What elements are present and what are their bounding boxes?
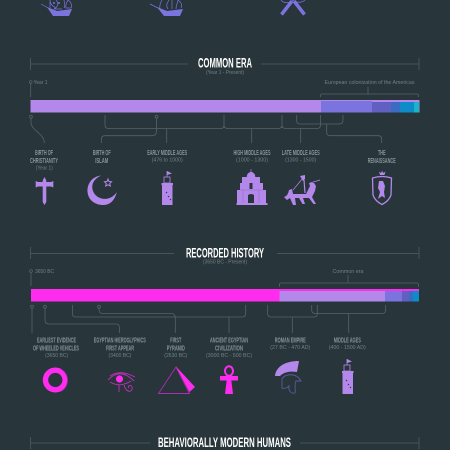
bracket: common era (280, 269, 418, 287)
timeline bar: recorded history (31, 289, 419, 302)
bracket: European colonization: European colonization of the Americas (324, 80, 415, 86)
label: early middle ages: (476 to 1000) (152, 158, 183, 164)
connectors: recorded history (32, 305, 386, 333)
label: late middle ages: (1300 - 1500) (285, 158, 317, 164)
label: the renaissance: THE (378, 150, 386, 157)
label: middle ages: (400 - 1500 AD) (329, 345, 366, 351)
label: early middle ages: EARLY MIDDLE AGES (147, 150, 187, 157)
panel: common era (29, 56, 420, 205)
marker: year 1 (29, 80, 48, 97)
label: wheeled vehicles: OF WHEELED VEHICLES (33, 346, 79, 352)
label: high middle ages (234, 150, 271, 164)
label: roman empire: (27 BC - 470 AD) (270, 345, 311, 351)
icon: eye of horus (108, 373, 135, 392)
connectors: common era (31, 115, 382, 143)
icon: renaissance shield (372, 171, 392, 204)
bracket: common era: Common era (332, 269, 364, 275)
label: hieroglyphics: EGYPTIAN HIEROGLYPHICS (94, 338, 146, 344)
icon: crossed swords (281, 0, 305, 14)
label: middle ages (329, 338, 366, 351)
label: first pyramid: PYRAMID (167, 346, 185, 352)
label: birth of christianity: BIRTH OF (35, 150, 53, 157)
label: birth of christianity (30, 150, 58, 172)
label: first pyramid: FIRST (170, 338, 182, 344)
label: ancient egyptian civilization: ANCIENT EGYPTIAN (210, 338, 248, 344)
label: the renaissance (368, 150, 396, 165)
label: late middle ages (282, 150, 320, 164)
label: birth of islam (93, 150, 111, 165)
icon: cross (36, 177, 53, 205)
label: wheeled vehicles: (3650 BC) (45, 353, 69, 359)
label: middle ages: MIDDLE AGES (334, 338, 361, 344)
label: roman empire (270, 338, 311, 351)
label: first pyramid (164, 338, 188, 359)
label: birth of christianity: CHRISTIANITY (30, 158, 58, 165)
icon: ship left (41, 0, 72, 16)
marker: year 1: Year 1 (34, 80, 48, 86)
icon: pyramid (158, 366, 195, 394)
marker: 3650 BC (30, 269, 54, 286)
label: first pyramid: (2630 BC) (164, 353, 188, 359)
subheading: common era range: (Year 1 - Present) (206, 70, 244, 76)
icon: roman helmet (275, 361, 301, 393)
icon: crescent and star (87, 176, 117, 205)
label: high middle ages: HIGH MIDDLE AGES (234, 150, 271, 157)
heading rule: behaviorally modern humans (30, 437, 419, 449)
label: wheeled vehicles: EARLIEST EVIDENCE (37, 338, 76, 344)
label: ancient egyptian civilization (206, 338, 252, 359)
icon: knight on horse (284, 175, 320, 205)
label: wheeled vehicles (33, 338, 79, 359)
label: late middle ages: LATE MIDDLE AGES (282, 150, 320, 157)
heading rule: recorded history (30, 247, 419, 259)
icon: tower (342, 359, 354, 394)
label: birth of christianity: (Year 1) (36, 166, 53, 172)
label: ancient egyptian civilization: CIVILIZATION (215, 346, 243, 352)
heading: common era: COMMON ERA (198, 56, 252, 71)
label: ancient egyptian civilization: (3000 BC - 500 BC) (206, 353, 252, 359)
subheading: recorded history range: (3650 BC - Present) (203, 260, 247, 266)
timeline bar: common era (30, 100, 420, 112)
heading: recorded history: RECORDED HISTORY (186, 245, 264, 260)
heading: behaviorally modern humans: BEHAVIORALLY MODERN HUMANS (158, 435, 291, 450)
heading rule: common era (30, 58, 419, 70)
label: birth of islam: ISLAM (95, 158, 108, 165)
marker: 3650 BC: 3650 BC (35, 269, 54, 275)
label: early middle ages (147, 150, 187, 164)
label: hieroglyphics: (3400 BC) (108, 353, 132, 359)
icon: ship centre (150, 0, 183, 16)
label: roman empire: ROMAN EMPIRE (275, 338, 306, 344)
label: hieroglyphics: FIRST APPEAR (106, 346, 134, 352)
label: the renaissance: RENAISSANCE (368, 158, 396, 165)
label: hieroglyphics (94, 338, 146, 359)
label: high middle ages: (1000 - 1300) (236, 158, 268, 164)
label: birth of islam: BIRTH OF (93, 150, 111, 157)
bracket: European colonization (320, 80, 418, 97)
icon: wheel (46, 369, 68, 392)
panel: recorded history (30, 245, 419, 394)
icon: tower (162, 171, 173, 205)
icon: ankh (220, 366, 238, 394)
icon: castle (236, 169, 268, 205)
panel: behaviorally modern humans (30, 435, 419, 450)
panel: top icons row (41, 0, 305, 16)
